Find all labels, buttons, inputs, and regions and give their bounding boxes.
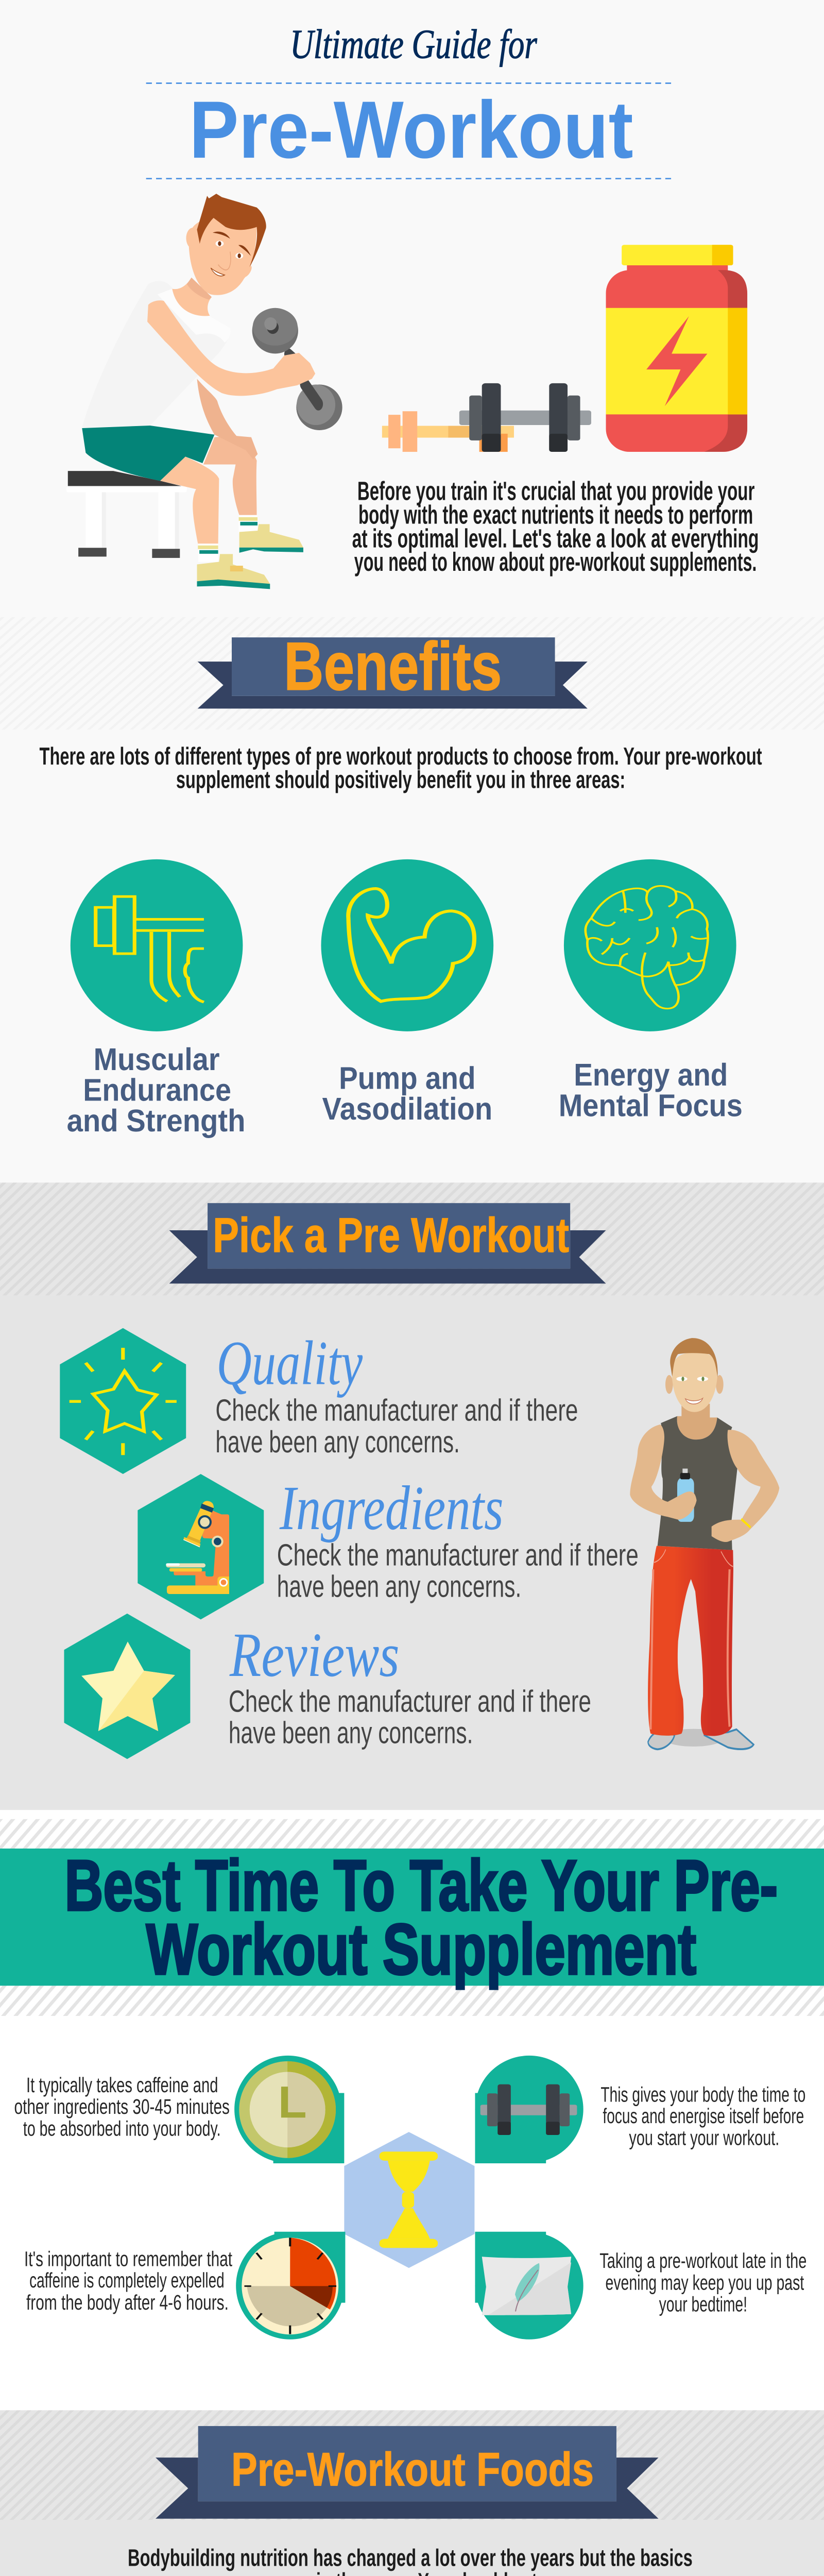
text: Reviews description <box>229 1684 591 1750</box>
label: Muscular Endurance and Strength <box>67 1042 246 1139</box>
icon: gray dumbbell <box>459 383 591 452</box>
ribbon: Benefits heading: Benefits <box>284 629 502 705</box>
text: caffeine expelled: from the body after 4-6 hours. <box>26 2290 229 2314</box>
text: benefits intro <box>40 742 762 793</box>
stripe band <box>0 617 824 730</box>
icon: clock with 4-6 hour wedge <box>236 2232 345 2340</box>
panel: pick a pre workout <box>0 1182 824 1803</box>
label: Muscular Endurance and Strength: Endurance <box>83 1073 231 1108</box>
text: absorption time: to be absorbed into your body. <box>23 2116 221 2140</box>
front leg <box>160 456 219 544</box>
icon: orange barbell <box>382 411 514 452</box>
illustration: athlete holding a water bottle <box>630 1338 779 1749</box>
label: Muscular Endurance and Strength: and Strength <box>67 1103 246 1139</box>
ribbon: Pre-Workout Foods heading: Pre-Workout Foods <box>231 2443 594 2496</box>
text: focus time <box>600 2082 805 2150</box>
stripe band <box>0 1182 824 1295</box>
panel: pre-workout foods <box>0 2396 824 2576</box>
icon: muscular endurance weight stack <box>71 859 243 1031</box>
wristband <box>741 1519 750 1528</box>
head <box>186 194 266 295</box>
back leg <box>203 437 257 515</box>
front sock and shoe <box>197 544 270 589</box>
text: absorption time: other ingredients 30-45 minutes <box>14 2094 230 2119</box>
text: late evening warning <box>599 2249 806 2316</box>
floor shadow <box>663 1729 725 1747</box>
head <box>665 1338 724 1412</box>
arm: right on hip <box>712 1430 779 1542</box>
dumbbell in hand <box>252 308 342 430</box>
label: Energy and Mental Focus <box>559 1057 743 1123</box>
subtitle: Ultimate Guide for: Ultimate Guide for <box>290 21 538 67</box>
raised arm <box>147 300 315 396</box>
heading: Quality: Quality <box>216 1328 363 1398</box>
water bottle <box>677 1469 694 1522</box>
trousers <box>648 1546 733 1736</box>
text: Reviews description: have been any concerns. <box>229 1715 473 1750</box>
text: caffeine expelled: It's important to remember that <box>24 2247 232 2270</box>
text: caffeine expelled <box>24 2247 232 2314</box>
heading: Ingredients: Ingredients <box>279 1473 504 1543</box>
icon: dumbbell in teal circle <box>475 2056 583 2163</box>
ribbon: Pre-Workout Foods heading <box>156 2426 659 2519</box>
icon: microscope <box>166 1501 229 1594</box>
text: absorption time: It typically takes caffeine and <box>26 2073 218 2097</box>
ribbon: Pick a Pre Workout heading: Pick a Pre Workout <box>213 1208 569 1263</box>
icon: brain <box>564 859 736 1031</box>
icon: flexed bicep <box>321 859 493 1031</box>
stripe band: bottom <box>0 1985 824 2016</box>
panel: header and intro <box>0 0 824 619</box>
neck <box>172 278 212 316</box>
label: Pump and Vasodilation <box>322 1061 492 1126</box>
illustration: man lifting dumbbell on a bench <box>66 194 342 589</box>
neck <box>677 1404 717 1439</box>
icon: ingredients hexagon <box>138 1474 264 1619</box>
title: Pre-Workout: Pre-Workout <box>189 84 633 175</box>
label: Pump and Vasodilation: Vasodilation <box>322 1091 492 1126</box>
panel: best time to take your pre-workout <box>0 1803 824 2396</box>
icon: reviews star hexagon <box>64 1614 190 1759</box>
tank top <box>658 1416 737 1550</box>
icon: supplement jar <box>606 245 747 452</box>
text: Ingredients description <box>277 1537 639 1604</box>
icon: quality star hexagon <box>60 1328 186 1474</box>
text: Quality description: have been any concerns. <box>215 1425 460 1459</box>
label: Muscular Endurance and Strength: Muscular <box>94 1042 220 1077</box>
divider: top dashed line <box>146 82 674 84</box>
back sock and shoe <box>239 515 303 553</box>
stripe band <box>0 2410 824 2520</box>
label: Energy and Mental Focus: Energy and <box>574 1057 728 1092</box>
icon: hourglass hexagon <box>344 2132 474 2268</box>
text: caffeine expelled: caffeine is completely expelled <box>29 2268 225 2292</box>
shirt <box>82 281 230 427</box>
heading: Reviews: Reviews <box>229 1619 400 1690</box>
icon: wall clock <box>234 2056 344 2163</box>
ribbon: Pick a Pre Workout heading <box>169 1203 606 1283</box>
text: Quality description <box>215 1393 578 1459</box>
lowered arm <box>197 379 258 459</box>
divider: bottom dashed line <box>146 178 674 179</box>
label: Pump and Vasodilation: Pump and <box>339 1061 475 1096</box>
shoes <box>648 1730 753 1749</box>
icon: pillow with feather <box>475 2232 583 2340</box>
shorts <box>82 426 214 481</box>
panel: benefits <box>0 617 824 1188</box>
bench <box>66 471 187 558</box>
text: intro paragraph <box>352 476 759 577</box>
arm: left with hand on bottle <box>630 1425 697 1520</box>
text: Ingredients description: have been any concerns. <box>277 1569 521 1604</box>
text: absorption time <box>14 2073 230 2140</box>
ribbon: Benefits heading <box>198 629 588 708</box>
stripe band: top <box>0 1819 824 1849</box>
heading banner <box>0 1845 824 1990</box>
